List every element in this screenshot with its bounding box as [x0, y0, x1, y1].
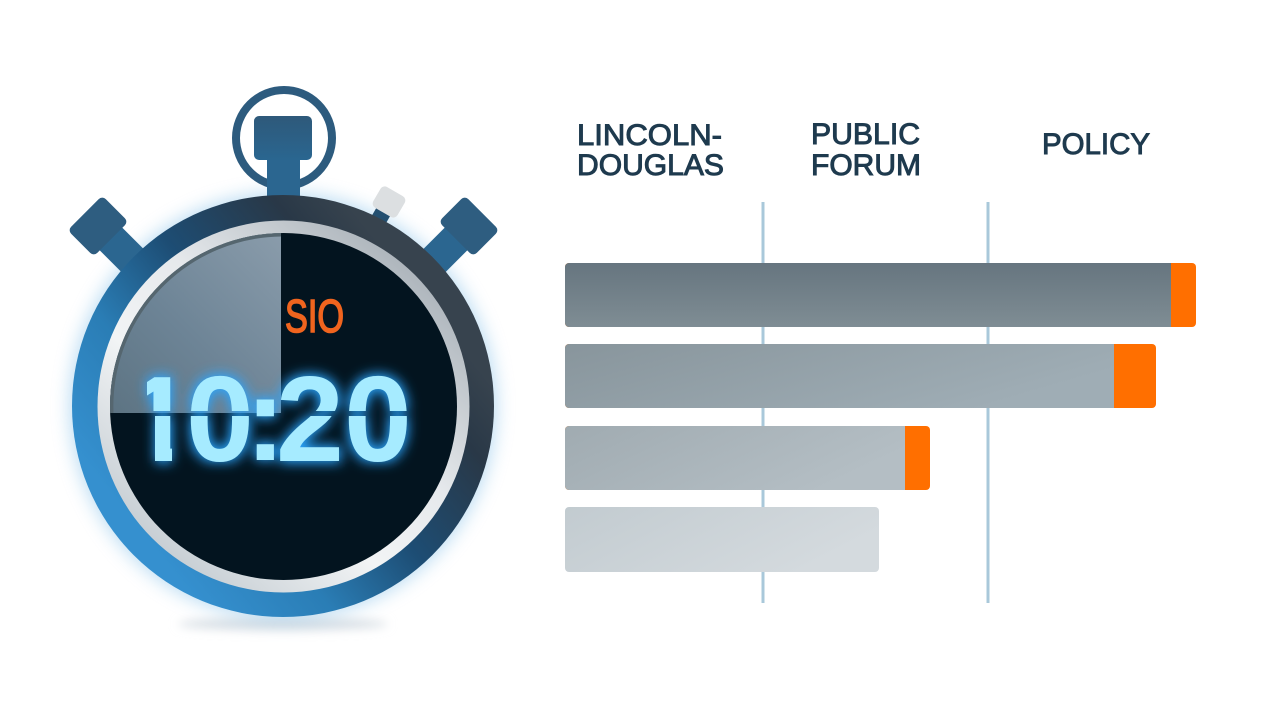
blue halo — [70, 193, 496, 619]
column header: Public Forum: PUBLIC — [811, 118, 920, 151]
digital time: 10:20 — [125, 351, 412, 487]
small orange label: SIO — [285, 290, 344, 342]
inner white bezel — [98, 220, 470, 592]
bar chart — [565, 263, 1196, 572]
column header: Policy: POLICY — [1042, 128, 1150, 161]
bar 4 — [565, 507, 879, 572]
outer case — [72, 195, 494, 617]
right pusher — [409, 196, 499, 286]
elapsed quadrant — [105, 233, 281, 413]
bar 1 — [565, 263, 1196, 327]
column header: Lincoln-Douglas — [577, 119, 724, 182]
bar 3 — [565, 426, 930, 490]
crown ring — [236, 90, 332, 186]
dark watch face — [110, 233, 457, 580]
divider lines — [762, 202, 990, 603]
left pusher — [68, 196, 158, 286]
column header: Lincoln-Douglas: LINCOLN- — [577, 119, 722, 152]
stopwatch — [68, 90, 499, 630]
digital time: 10:20 — [125, 351, 412, 487]
drop shadow — [178, 618, 388, 630]
column header: Lincoln-Douglas: DOUGLAS — [577, 149, 724, 182]
small side button — [364, 185, 407, 231]
crown stem — [267, 158, 300, 198]
column header: Public Forum: FORUM — [811, 149, 921, 182]
column header: Public Forum — [811, 118, 921, 182]
bar 2 — [565, 344, 1156, 408]
crown knob — [254, 116, 312, 160]
